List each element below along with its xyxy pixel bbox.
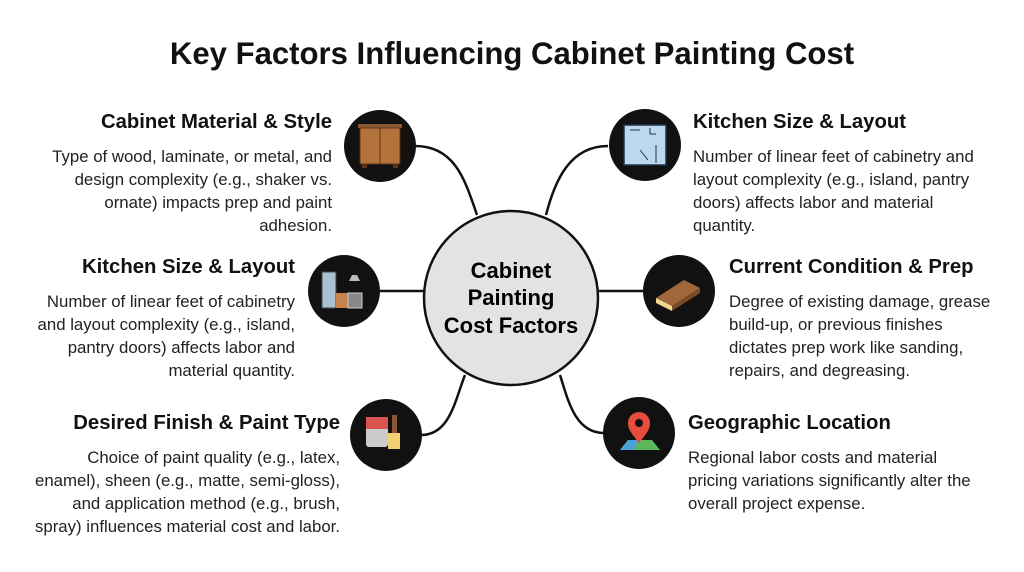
- left block 1: design complexity (e.g., shaker vs.: [75, 170, 332, 189]
- right block 3: Geographic Location: [688, 412, 891, 434]
- left block 1: adhesion.: [259, 216, 332, 235]
- center circle: [424, 211, 598, 385]
- left block 3: enamel), sheen (e.g., matte, semi-gloss),: [35, 471, 340, 490]
- connectors: [380, 146, 643, 435]
- right block 3: [688, 412, 971, 513]
- right block 3: overall project expense.: [688, 494, 865, 513]
- icon: wood board: [643, 255, 715, 327]
- right block 2: Degree of existing damage, grease: [729, 292, 990, 311]
- title: Key Factors Influencing Cabinet Painting Cost: [170, 36, 854, 71]
- right block 2: repairs, and degreasing.: [729, 361, 910, 380]
- center circle: Cabinet: [471, 258, 552, 283]
- left block 2: Kitchen Size & Layout: [82, 256, 295, 278]
- right block 2: Current Condition & Prep: [729, 256, 974, 278]
- left block 2: and layout complexity (e.g., island,: [38, 315, 295, 334]
- right block 1: doors) affects labor and material: [693, 193, 933, 212]
- left block 3: Desired Finish & Paint Type: [73, 412, 340, 434]
- right block 1: Kitchen Size & Layout: [693, 111, 906, 133]
- center circle: Painting: [468, 285, 554, 310]
- icon: paint can: [350, 399, 422, 471]
- icon: cabinet: [344, 110, 416, 182]
- left block 1: Cabinet Material & Style: [101, 111, 332, 133]
- left block 2: Number of linear feet of cabinetry: [47, 292, 295, 311]
- left block 3: Choice of paint quality (e.g., latex,: [87, 448, 340, 467]
- left block 1: [52, 111, 332, 235]
- left block 3: [35, 412, 340, 536]
- right block 1: layout complexity (e.g., island, pantry: [693, 170, 969, 189]
- right block 1: quantity.: [693, 216, 755, 235]
- left block 2: pantry doors) affects labor and: [68, 338, 295, 357]
- right block 2: dictates prep work like sanding,: [729, 338, 963, 357]
- right block 2: build-up, or previous finishes: [729, 315, 943, 334]
- left block 3: and application method (e.g., brush,: [72, 494, 340, 513]
- left block 1: ornate) impacts prep and paint: [104, 193, 332, 212]
- left block 3: spray) influences material cost and labor.: [35, 517, 340, 536]
- left block 2: [38, 256, 295, 380]
- icon: map pin: [603, 397, 675, 469]
- left block 1: Type of wood, laminate, or metal, and: [52, 147, 332, 166]
- right block 1: Number of linear feet of cabinetry and: [693, 147, 974, 166]
- right block 2: [729, 256, 990, 380]
- center circle: Cost Factors: [444, 313, 578, 338]
- left block 2: material quantity.: [168, 361, 295, 380]
- right block 3: Regional labor costs and material: [688, 448, 937, 467]
- right block 1: [693, 111, 974, 235]
- icon: floor plan: [609, 109, 681, 181]
- icon: kitchen: [308, 255, 380, 327]
- right block 3: pricing variations significantly alter the: [688, 471, 971, 490]
